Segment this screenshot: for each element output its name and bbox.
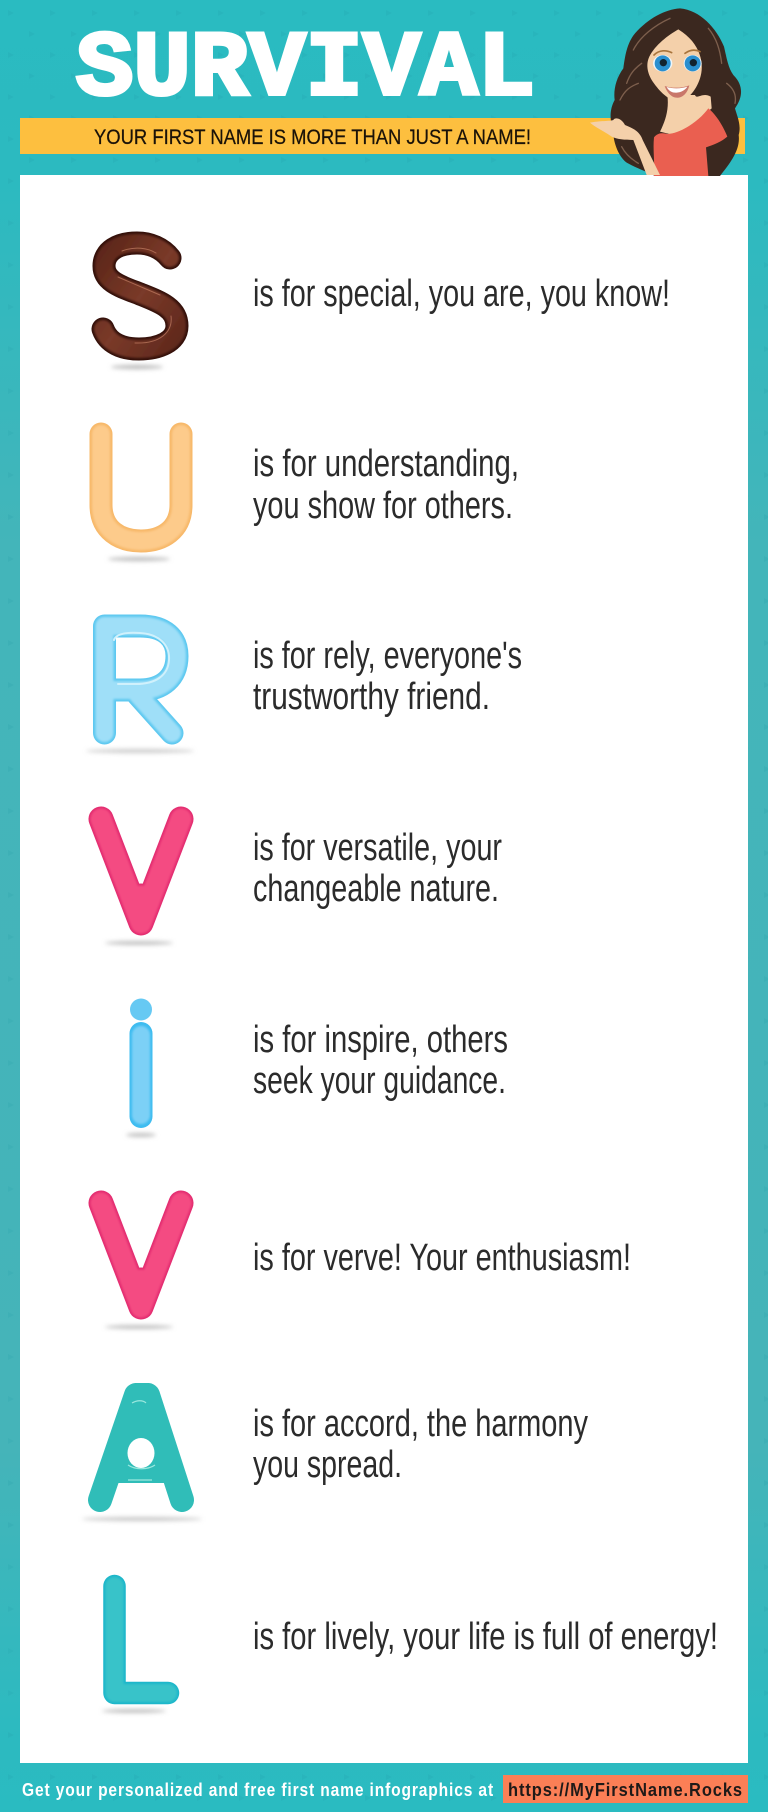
letter row: V <box>101 819 502 945</box>
letter U <box>101 434 181 541</box>
shadow <box>108 557 170 561</box>
shadow <box>111 365 163 369</box>
letter R <box>104 626 177 733</box>
text: seek your guidance. <box>253 1060 506 1102</box>
letter V <box>101 819 181 923</box>
neck and chest <box>660 95 712 135</box>
eyes <box>653 55 702 72</box>
shadow <box>86 749 194 753</box>
shadow <box>126 1133 156 1137</box>
letter row: A <box>82 1383 588 1521</box>
letter row: V second <box>101 1203 631 1329</box>
letter S <box>103 243 177 349</box>
url badge <box>503 1775 748 1803</box>
letter row: S <box>103 243 670 369</box>
text: is for inspire, others <box>253 1019 508 1061</box>
eyebrows <box>654 50 700 55</box>
letter i <box>130 998 152 1128</box>
footer call to action <box>22 1775 748 1803</box>
arm and hand <box>590 118 660 175</box>
text: trustworthy friend. <box>253 676 490 718</box>
red shirt <box>654 108 727 176</box>
shadow <box>105 941 173 945</box>
text: changeable nature. <box>253 868 499 910</box>
character: woman with dark hair <box>590 8 741 176</box>
text: is for accord, the harmony <box>253 1403 588 1445</box>
letter V <box>101 1203 181 1307</box>
subtitle band <box>20 118 745 154</box>
letter L <box>114 1586 168 1693</box>
face <box>647 29 702 101</box>
hair <box>611 8 741 176</box>
letter row: I <box>126 998 508 1137</box>
letter row: R <box>86 626 522 753</box>
text: you show for others. <box>253 485 513 527</box>
shadow <box>82 1517 202 1521</box>
text: is for verve! Your enthusiasm! <box>253 1237 631 1279</box>
text <box>253 635 522 718</box>
subtitle band: YOUR FIRST NAME IS MORE THAN JUST A NAME! <box>94 125 531 149</box>
text <box>253 1019 508 1102</box>
text: is for rely, everyone's <box>253 635 522 677</box>
text <box>253 443 519 527</box>
mouth <box>665 85 689 98</box>
text <box>253 827 502 910</box>
title: SURVIVAL <box>76 17 535 122</box>
shadow <box>102 1709 166 1713</box>
shadow <box>105 1325 173 1329</box>
text: is for understanding, <box>253 443 519 485</box>
text: is for versatile, your <box>253 827 502 869</box>
footer call to action: Get your personalized and free first name infographics at <box>22 1780 494 1800</box>
text: you spread. <box>253 1444 402 1486</box>
letter A <box>100 1383 182 1500</box>
letter row: U <box>101 434 519 561</box>
letter row: L <box>102 1586 718 1713</box>
url badge: https://MyFirstName.Rocks <box>508 1780 743 1800</box>
text <box>253 1403 588 1486</box>
